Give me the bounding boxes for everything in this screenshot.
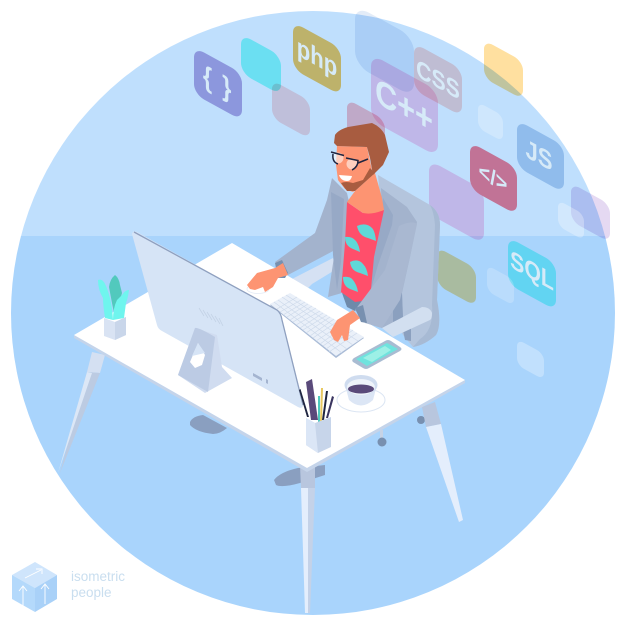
phone [352,340,402,369]
neck [347,173,384,214]
tile: html tag [470,142,517,215]
tile: SQL: SQL [510,246,554,297]
logo [12,562,125,612]
pen cup [299,379,334,453]
tile: CSS: CSS [416,55,460,106]
tile: green [437,247,476,306]
leaves [98,280,113,320]
tile: small white low [517,339,544,380]
keyboard [270,293,364,358]
tile: C++: C++ [375,70,433,142]
shirt [341,202,384,302]
desk leg left [58,352,105,473]
person torso [275,178,417,328]
coffee cup and saucer [337,375,385,412]
right hand with cuff [330,305,367,342]
jacket right sleeve over desk [355,222,417,328]
tile: large purple [429,160,484,244]
plant [98,275,129,340]
hair [334,123,389,175]
logo text: isometric [71,569,125,584]
tile: curly braces [194,47,242,120]
tile: mauve [272,80,310,139]
chair casters [378,416,425,446]
tile: JS: JS [525,134,553,178]
monitor [132,231,303,408]
trousers [342,293,368,311]
shirt fish [343,224,376,292]
tile: html tag: </> [479,157,507,198]
smile [339,175,352,181]
tile: SQL [508,237,556,310]
monitor ports [253,373,268,384]
tile: small white right [558,200,584,240]
person head [331,123,389,214]
beard [341,168,375,191]
logo: people [71,585,112,600]
desk leg right [422,402,463,522]
mouse [247,284,269,294]
tile: dark pink [347,99,385,158]
monitor back panel [132,231,303,408]
jacket right [355,188,417,328]
pens [306,379,318,420]
tile: php: php [297,33,337,83]
chair left armrest [292,258,335,290]
desk top [74,243,465,472]
tile: yellow [484,40,523,99]
shoes under desk [190,415,325,486]
pot [104,317,126,340]
tile: small white middle [487,265,514,306]
tile: curly braces: { } [203,58,233,106]
office chair back [378,175,440,347]
jacket lapels [331,192,344,290]
tile: small white top [478,102,503,142]
face [336,146,373,192]
monitor edges [134,232,303,405]
glasses [331,152,368,170]
chair right armrest [382,307,432,337]
left hand with cuff [247,260,288,292]
jacket left [275,178,349,297]
tile: right purple [571,183,610,242]
tile: large pale blue [355,5,414,97]
tile: php [293,22,341,95]
monitor stand [178,328,232,393]
monitor vents [199,308,223,326]
cup [306,417,331,453]
desk leg front [300,465,315,613]
tile: C++ [371,54,438,157]
tile: CSS [414,43,462,116]
tile: JS [517,120,564,193]
stand cable hole [190,343,205,368]
tile: cyan [241,34,281,95]
logo cube [12,562,57,612]
